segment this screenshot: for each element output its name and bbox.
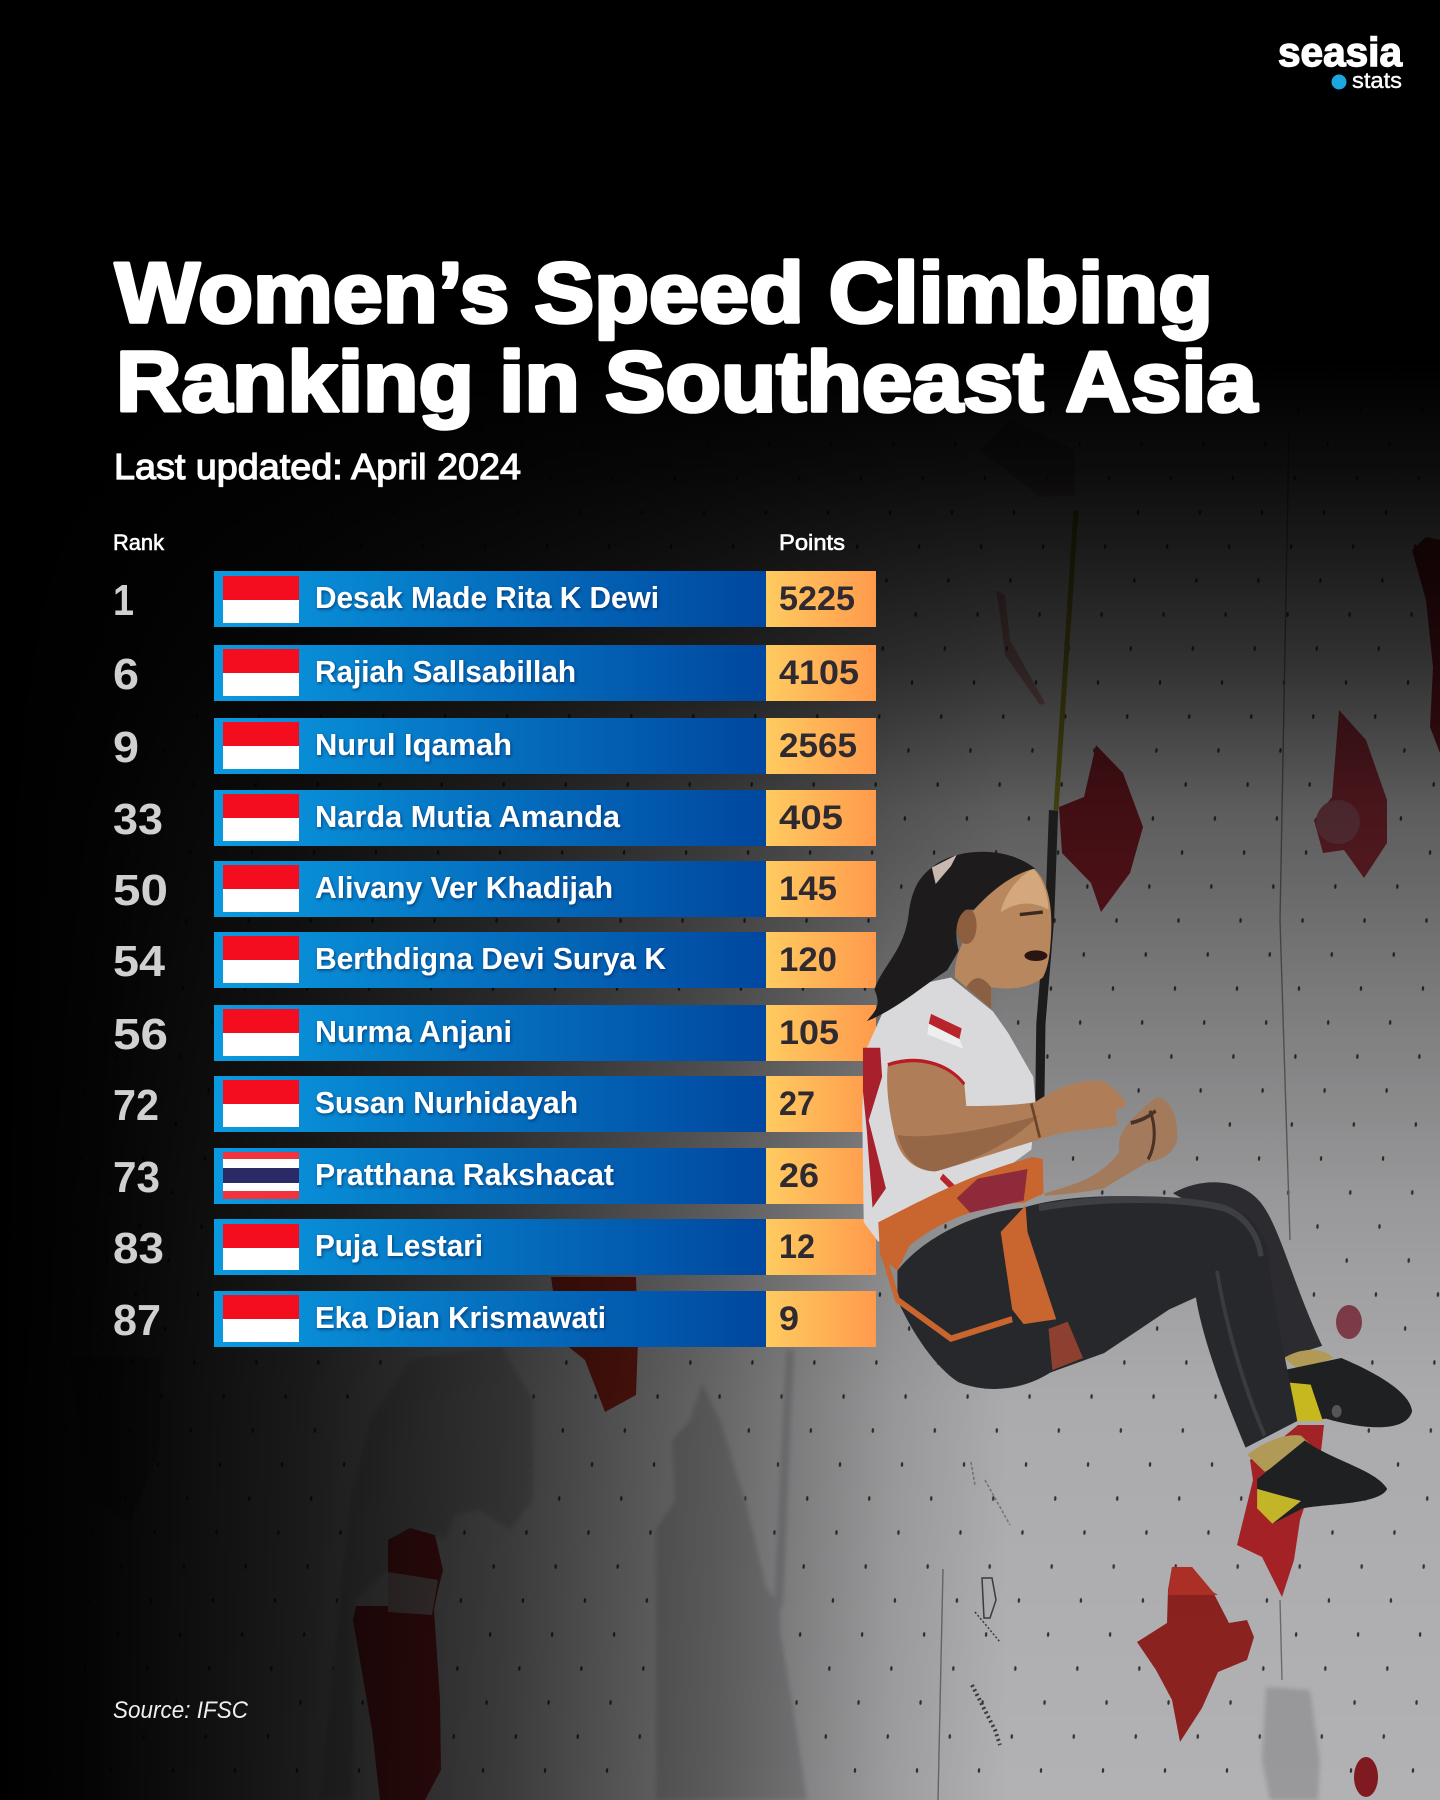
wall shadows: [320, 1345, 1320, 1800]
row: rank 54: [113, 932, 876, 988]
row: rank 72: 27: [779, 1085, 815, 1123]
row: rank 56: [113, 1005, 876, 1061]
row: rank 9: Nurul Iqamah: [315, 727, 512, 762]
far leg: [1173, 1182, 1322, 1358]
row: rank 50: Alivany Ver Khadijah: [315, 870, 613, 905]
row: rank 1: Desak Made Rita K Dewi: [315, 580, 659, 615]
row: rank 1: 5225: [779, 580, 855, 618]
row: rank 83: 83: [113, 1224, 164, 1273]
row: rank 73: [113, 1148, 876, 1204]
row: rank 72: Susan Nurhidayah: [315, 1085, 578, 1120]
row: rank 33: [113, 790, 876, 846]
row: rank 56: 105: [779, 1014, 839, 1052]
title: Ranking in Southeast Asia: [116, 335, 1258, 430]
row: rank 50: 145: [779, 870, 837, 908]
row: rank 1: [113, 571, 876, 627]
row: rank 54: 120: [779, 941, 837, 979]
row: rank 54: Berthdigna Devi Surya K: [315, 941, 667, 976]
row: rank 73: 26: [779, 1157, 819, 1195]
row: rank 54: 54: [113, 937, 166, 986]
row: rank 9: 2565: [779, 727, 857, 765]
row: rank 72: [113, 1076, 876, 1132]
harness and thigh loops: [878, 1157, 1044, 1271]
row: rank 6: Rajiah Sallsabillah: [315, 654, 576, 689]
wall seams: [938, 430, 1290, 1800]
row: rank 87: Eka Dian Krismawati: [315, 1300, 606, 1335]
row: rank 6: 4105: [779, 654, 859, 692]
logo: seasia stats: seasia: [1278, 29, 1403, 75]
title: [115, 246, 1258, 430]
row: rank 6: [113, 645, 876, 701]
row: rank 73: 73: [113, 1153, 160, 1202]
row: rank 56: Nurma Anjani: [315, 1014, 512, 1049]
row: rank 83: 12: [779, 1228, 815, 1266]
row: rank 87: 9: [779, 1300, 799, 1338]
athlete: climber hanging from rope: [862, 810, 1412, 1524]
hair and ponytail: [867, 852, 1035, 1021]
logo: seasia stats: stats: [1352, 68, 1402, 93]
wall logos: [971, 1462, 1010, 1745]
near leg and hips: [897, 1196, 1297, 1448]
rope: [1040, 810, 1054, 1106]
source note: Source: IFSC: [113, 1697, 249, 1724]
near shoe: [1248, 1435, 1387, 1524]
arm behind: forearm and fist: [1045, 1097, 1177, 1196]
title: Women’s Speed Climbing: [115, 246, 1213, 341]
thigh strap: [884, 1205, 1083, 1370]
head and face: [955, 868, 1051, 1009]
row: rank 83: [113, 1219, 876, 1275]
row: rank 33: 405: [779, 799, 843, 837]
ranking table: [113, 571, 876, 1347]
row: rank 33: 33: [113, 795, 163, 844]
climbing holds: [69, 420, 1440, 1800]
row: rank 72: 72: [113, 1081, 159, 1130]
row: rank 9: 9: [113, 723, 139, 772]
near arm: [887, 1061, 1126, 1171]
row: rank 33: Narda Mutia Amanda: [315, 799, 621, 834]
far shoe: [1284, 1350, 1412, 1427]
row: rank 50: [113, 861, 876, 917]
row: rank 50: 50: [113, 866, 168, 915]
row: rank 1: 1: [113, 576, 134, 625]
row: rank 87: 87: [113, 1296, 161, 1345]
row: rank 56: 56: [113, 1010, 168, 1059]
rope: [1056, 510, 1076, 810]
row: rank 83: Puja Lestari: [315, 1228, 483, 1263]
shirt: [862, 978, 1036, 1242]
column header: rank: Rank: [113, 530, 165, 555]
row: rank 9: [113, 718, 876, 774]
sleeve trim: [888, 1061, 964, 1084]
row: rank 73: Pratthana Rakshacat: [315, 1157, 614, 1192]
subtitle: Last updated: April 2024: [114, 446, 521, 487]
column header: points: Points: [779, 530, 845, 555]
row: rank 87: [113, 1291, 876, 1347]
row: rank 6: 6: [113, 650, 139, 699]
